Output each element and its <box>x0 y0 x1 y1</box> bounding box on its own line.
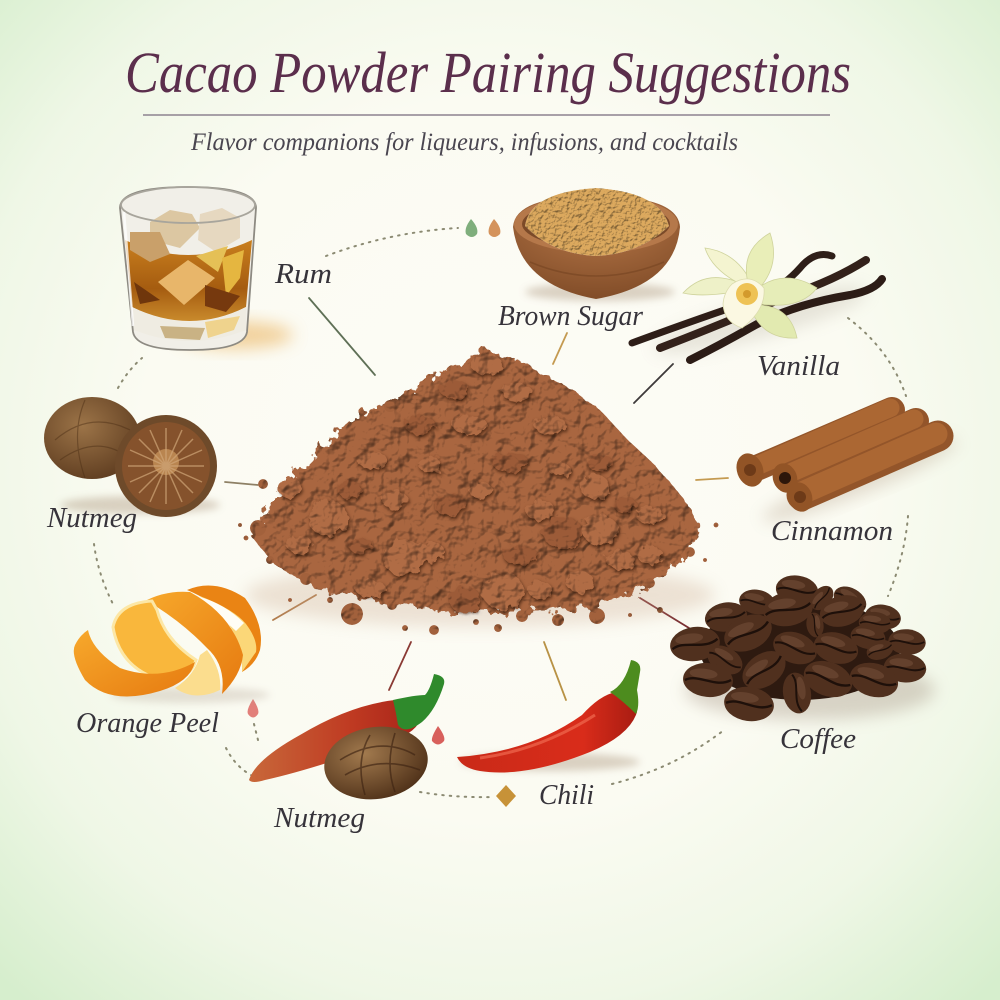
label: rum: Rum <box>274 258 332 290</box>
label: nutmeg bottom: Nutmeg <box>273 802 365 834</box>
label: coffee: Coffee <box>780 723 856 755</box>
label: vanilla: Vanilla <box>757 350 840 382</box>
icon: coffee beans <box>668 573 935 724</box>
icon: cinnamon sticks <box>732 408 963 532</box>
icon: vanilla <box>632 233 882 366</box>
small accent markers <box>248 219 516 807</box>
subtitle: Flavor companions for liqueurs, infusions, and cocktails <box>190 129 738 156</box>
title: Cacao Powder Pairing Suggestions <box>125 40 851 105</box>
icon: orange peel <box>74 586 270 703</box>
icon: brown sugar bowl <box>513 188 680 301</box>
label: orange peel: Orange Peel <box>76 707 219 739</box>
dotted connecting ring <box>94 228 908 797</box>
cacao powder pile <box>238 350 718 635</box>
icon: rum glass <box>120 187 293 350</box>
label: nutmeg left: Nutmeg <box>46 502 137 534</box>
label: brown sugar: Brown Sugar <box>498 300 644 332</box>
icon: whole and halved nutmeg <box>44 397 220 517</box>
leader lines <box>225 298 728 700</box>
label: cinnamon: Cinnamon <box>771 515 893 547</box>
label: chili: Chili <box>539 779 594 811</box>
icon: red chili <box>457 660 640 772</box>
icon: dried chili and nutmeg <box>249 674 444 806</box>
